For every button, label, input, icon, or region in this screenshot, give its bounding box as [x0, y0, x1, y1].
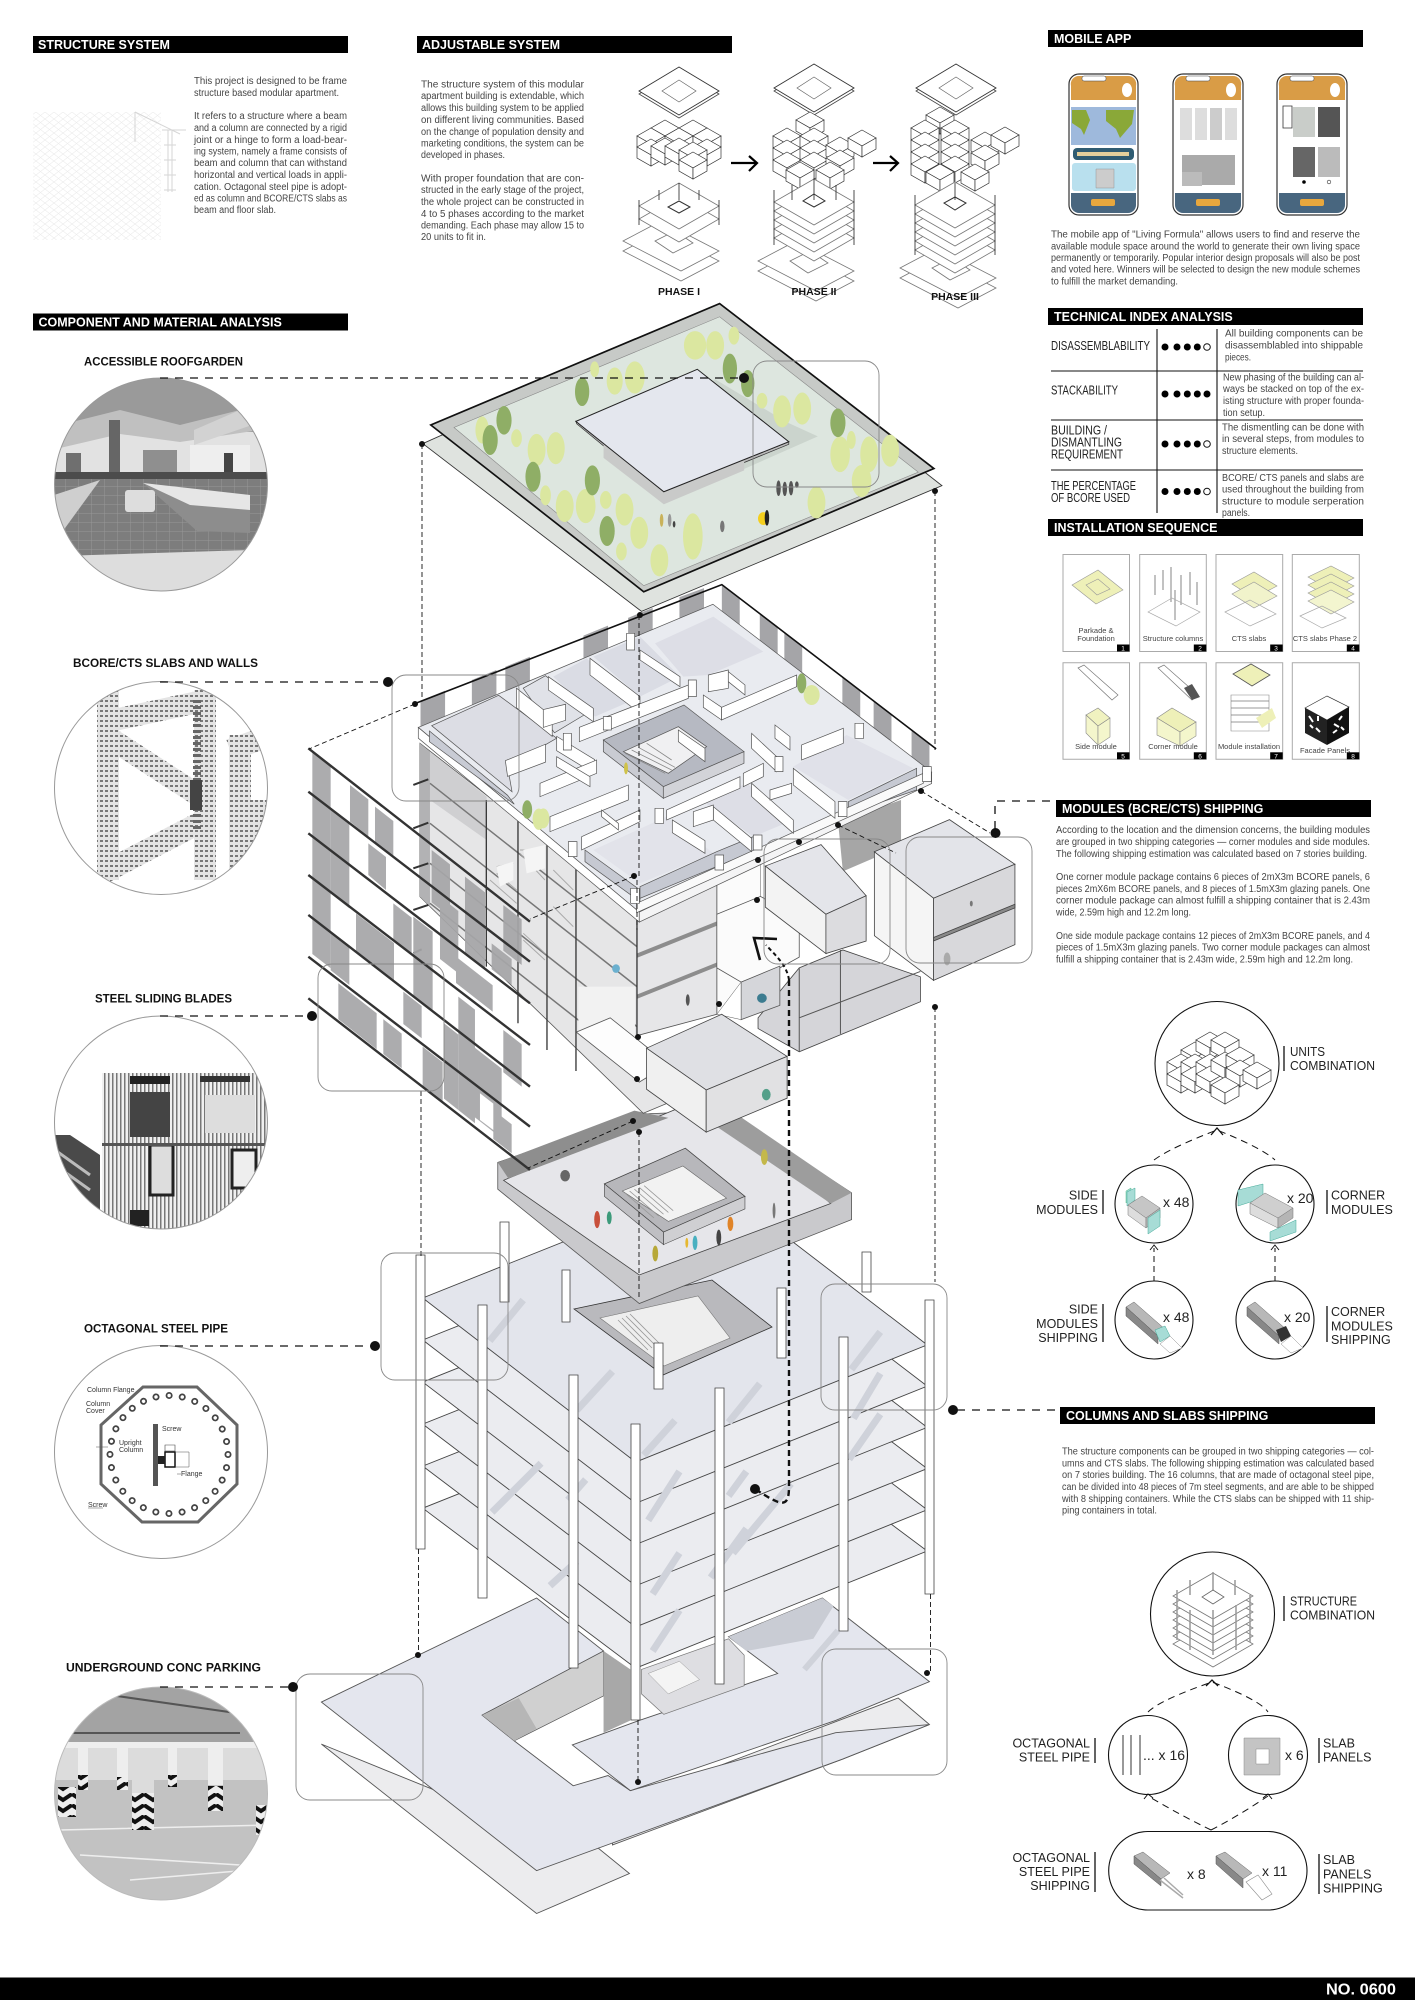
footer bar: NO. 0600 [1326, 1982, 1396, 1998]
row: disassemblability: disassemblabled into shippable [1225, 340, 1363, 352]
adjustable system text: 20 units to fit in. [421, 232, 486, 243]
card 8 [1292, 663, 1359, 760]
diagram: side modules shipping: MODULES [1036, 1317, 1098, 1331]
dashed projection lines [309, 444, 990, 1782]
columns shipping text [1061, 1446, 1374, 1516]
mobile app text: The mobile app of "Living Formula" allows users to find and reserve the [1051, 230, 1360, 240]
diagram: octagonal steel pipe: STEEL PIPE [1019, 1750, 1090, 1764]
structure system text: beam and floor slab. [194, 205, 276, 216]
label: underground conc parking: UNDERGROUND CONC PARKING [66, 1660, 261, 1674]
diagram: slab panels: SLAB [1323, 1736, 1355, 1750]
modules shipping text: corner module package can almost fulfill a shipping container that is 2.43m [1056, 896, 1370, 906]
card 7: Module installation [1218, 742, 1280, 751]
diagram: shipping pill: x 11 [1262, 1863, 1288, 1879]
structure system text: and a column are connected by a rigid [194, 123, 347, 134]
card 4 [1292, 554, 1359, 652]
diagram: units combination: UNITS [1290, 1045, 1325, 1059]
circle photo: roof garden [50, 375, 275, 600]
diagram: corner modules shipping [1236, 1281, 1393, 1359]
circle: octagonal steel pipe section: Flange [181, 1471, 203, 1478]
columns shipping text: can be divided into 48 pieces of 7m steel segments, and are able to be shipped [1062, 1482, 1374, 1493]
phase I diagram [623, 67, 721, 281]
phase II diagram [758, 64, 876, 301]
trees light [475, 327, 899, 576]
heading: modules shipping: MODULES (BCRE/CTS) SHIPPING [1062, 802, 1263, 816]
rear facade blades [421, 585, 929, 772]
heading: mobile app: MOBILE APP [1054, 32, 1131, 46]
phone 3: gallery screen [1277, 74, 1347, 215]
circle photo: steel blades [50, 1015, 275, 1235]
card 6: 6 [1198, 753, 1202, 760]
mobile app text: available module space around the world to generate their own living space [1051, 242, 1360, 252]
mobile app text: to fulfill the market demanding. [1051, 276, 1178, 288]
arrows: to structure combination [1148, 1680, 1268, 1712]
card 6: Corner module [1148, 742, 1198, 751]
diagram: corner modules shipping: x 20 [1284, 1309, 1311, 1325]
diagram: shipping pill: SHIPPING [1323, 1882, 1383, 1896]
row: stackability: tion setup. [1223, 408, 1265, 419]
main exploded axonometric [296, 304, 1032, 1914]
arrows: shipping to structure parts [1144, 1794, 1272, 1830]
room walls [540, 650, 843, 853]
diagram: slab panels [1228, 1716, 1371, 1794]
heading: installation sequence [1048, 519, 1363, 536]
module tower [413, 743, 1015, 1132]
technical index table [1051, 328, 1364, 519]
diagram: shipping pill: PANELS [1323, 1868, 1371, 1882]
label: accessible roofgarden: ACCESSIBLE ROOFGARDEN [84, 354, 243, 368]
phone 1: map screen [1069, 74, 1138, 215]
heading: technical index analysis: TECHNICAL INDEX ANALYSIS [1054, 310, 1233, 324]
row: stackability: isting structure with proper founda- [1223, 396, 1364, 407]
card 2: 2 [1198, 646, 1202, 652]
roof people [660, 480, 799, 532]
leader: columns shipping [948, 1405, 1060, 1415]
diagram: corner modules [1236, 1165, 1393, 1243]
adjustable system text: on different living communities. Based [421, 115, 584, 126]
card 4: 4 [1351, 646, 1355, 652]
card 1: Parkade & [1078, 626, 1114, 635]
structure system text: It refers to a structure where a beam [194, 111, 347, 122]
diagram: side modules shipping: x 48 [1163, 1309, 1190, 1325]
card 3: CTS slabs [1232, 634, 1267, 643]
phase II label: PHASE II [792, 286, 837, 298]
adjustable system text: on the change of population density and [421, 127, 584, 138]
adjustable system text: allows this building system to be applied [421, 103, 584, 114]
card 3 [1216, 554, 1283, 652]
diagram: slab panels: PANELS [1323, 1750, 1371, 1764]
phase III diagram [900, 64, 1019, 308]
adjustable system text: developed in phases. [421, 150, 505, 161]
row: building / dismantling requirement: REQUIREMENT [1051, 448, 1123, 462]
circle: octagonal steel pipe section: Screw [88, 1502, 108, 1509]
installation sequence cards [1063, 554, 1359, 760]
circle: octagonal steel pipe section: Screw [162, 1426, 182, 1433]
card 6 [1140, 663, 1206, 760]
small pillars [563, 633, 931, 903]
heading: adjustable system: ADJUSTABLE SYSTEM [422, 38, 560, 52]
diagram: units combination [1155, 1002, 1375, 1126]
row: percentage of bcore used: THE PERCENTAGE [1051, 479, 1136, 493]
adjustable system text: the whole project can be constructed in [421, 197, 584, 208]
icon: pipe container [1134, 1852, 1183, 1898]
row: building / dismantling requirement: structure elements. [1222, 446, 1298, 457]
heading: technical index analysis [1048, 308, 1363, 325]
icon: slab container [1216, 1852, 1272, 1900]
left rooms [432, 695, 557, 792]
diagram: side modules [1036, 1165, 1193, 1243]
connection dots [412, 441, 938, 1785]
structure system text: joint or a hinge to form a load-bear- [193, 135, 347, 146]
adjustable system text: 4 to 5 phases according to the market [421, 209, 584, 220]
card 7 [1216, 663, 1283, 760]
structure system text: structure based modular apartment. [194, 88, 339, 99]
label: bcore/cts slabs and walls: BCORE/CTS SLABS AND WALLS [73, 656, 258, 670]
modules shipping text: are grouped in two shipping categories — corner modules and side modules. [1056, 837, 1370, 848]
columns shipping text: on 7 stories building. The 16 columns, that are made of octagonal steel pipe, [1062, 1470, 1374, 1481]
card 1: Foundation [1077, 634, 1115, 643]
modules shipping text: One corner module package contains 6 pieces of 2mX3m BCORE panels, 6 [1056, 872, 1370, 883]
planters [797, 673, 806, 693]
circle: octagonal steel pipe section: Column [119, 1447, 143, 1454]
diagram: corner modules: CORNER [1331, 1188, 1385, 1202]
tower left face [413, 743, 668, 1113]
structure system text: ing system, namely a frame consists of [194, 146, 347, 158]
circle: octagonal steel pipe section: Column [86, 1401, 110, 1408]
diagram: shipping pill: SLAB [1323, 1853, 1355, 1867]
row: building / dismantling requirement: DISMANTLING [1051, 436, 1122, 450]
arrow: phase II to III [873, 156, 898, 171]
heading: structure system: STRUCTURE SYSTEM [38, 38, 170, 52]
diagram: octagonal steel pipe: ... x 16 [1143, 1747, 1185, 1763]
structure system text: beam and column that can withstand [194, 158, 347, 169]
circle: octagonal steel pipe section [54, 1346, 268, 1558]
phase III label: PHASE III [931, 291, 979, 303]
card 8: 8 [1351, 753, 1355, 760]
diagram: side modules: SIDE [1069, 1188, 1098, 1202]
card 1 [1063, 554, 1130, 652]
modules shipping text: One side module package contains 12 pieces of 2mX3m BCORE panels, and 4 [1056, 931, 1370, 942]
adjustable system text: The structure system of this modular [421, 80, 585, 90]
row: stackability: New phasing of the building can al- [1223, 372, 1364, 384]
card 7: 7 [1274, 753, 1278, 760]
heading: modules shipping [1056, 800, 1371, 817]
leader: roof garden [160, 373, 749, 383]
module box: upper middle [765, 845, 866, 954]
tower floor slabs [423, 1182, 927, 1668]
central stair core [603, 705, 744, 787]
assembly path arrow [750, 938, 789, 1503]
columns shipping text: with 8 shipping containers. While the CTS slabs can be shipped with 11 ship- [1061, 1494, 1374, 1505]
mobile app text: permanently or temporarily. Popular interior design proposals will also be post [1051, 253, 1360, 264]
module box: far right [874, 820, 1015, 980]
footer bar [0, 1978, 1415, 2000]
trees dark [483, 354, 846, 546]
heading: component and material analysis [33, 314, 348, 330]
heading: installation sequence: INSTALLATION SEQUENCE [1054, 521, 1217, 535]
diagram: corner modules: MODULES [1331, 1203, 1393, 1217]
card 5: Side module [1075, 742, 1117, 751]
heading: columns and slabs shipping [1060, 1407, 1375, 1424]
diagram: side modules shipping: SIDE [1069, 1302, 1098, 1316]
diagram: corner modules shipping: CORNER [1331, 1305, 1385, 1319]
row: stackability: ways be stacked on top of the ex- [1222, 384, 1364, 395]
core recess in slab [574, 1280, 772, 1375]
modules shipping text: pieces 2mX6m BCORE panels, and 8 pieces of 1.5mX3m glazing panels. One [1056, 884, 1370, 895]
modules shipping text: wide, 2.59m high and 12.2m long. [1055, 908, 1191, 918]
roof garden slab [423, 304, 942, 611]
diagram: side modules: MODULES [1036, 1203, 1098, 1217]
row: percentage of bcore used: BCORE/ CTS panels and slabs are [1222, 473, 1364, 484]
diagram: units combination: COMBINATION [1290, 1059, 1375, 1073]
diagram: slab panels: x 6 [1285, 1747, 1304, 1763]
circle: octagonal steel pipe section: Column Flange [87, 1387, 135, 1394]
diagram: side modules shipping: SHIPPING [1038, 1331, 1098, 1345]
leader: bcore slabs [160, 677, 393, 687]
arrow: side shipping to side modules [1150, 1245, 1158, 1282]
diagram: side modules shipping [1036, 1281, 1193, 1359]
phone 2: catalogue screen [1173, 74, 1243, 215]
mobile app text [1051, 230, 1360, 288]
structure system text: horizontal and vertical loads in appli- [194, 170, 347, 181]
modules shipping text: pieces of 1.5mX3m glazing panels. Two corner module packages can almost [1056, 942, 1370, 954]
diagram: corner modules: x 20 [1287, 1190, 1314, 1206]
row: disassemblability: pieces. [1225, 352, 1251, 364]
structure system text [193, 76, 347, 216]
diagram: shipping pill [1012, 1832, 1383, 1910]
mobile app text: and voted here. Winners will be selected to design the new module schemes [1051, 264, 1360, 276]
row: building / dismantling requirement: in several steps, from modules to [1222, 434, 1364, 445]
diagram: shipping pill: STEEL PIPE [1019, 1865, 1090, 1879]
circle photo: underground parking [50, 1685, 275, 1905]
row: stackability: STACKABILITY [1051, 384, 1119, 398]
card 8: Facade Panels [1300, 746, 1350, 755]
heading: mobile app [1048, 30, 1363, 47]
card 2 [1140, 554, 1206, 652]
person on stair [624, 762, 628, 774]
adjustable system text: apartment building is extendable, which [421, 91, 584, 102]
top floor rooms [415, 585, 936, 922]
structure system text: ed as column and BCORE/CTS slabs as [194, 194, 347, 204]
card 3: 3 [1274, 646, 1278, 652]
card 2: Structure columns [1143, 634, 1203, 643]
people [560, 1149, 775, 1261]
row: building / dismantling requirement [1051, 422, 1364, 462]
module box: front [647, 1014, 787, 1132]
modules shipping text: According to the location and the dimension concerns, the building modules [1056, 825, 1370, 836]
row: building / dismantling requirement: BUILDING / [1051, 424, 1107, 438]
row: disassemblability: DISASSEMBLABILITY [1051, 339, 1151, 353]
circle: octagonal steel pipe section: Cover [86, 1408, 105, 1415]
leader: steel blades [160, 1011, 317, 1021]
card 1: 1 [1121, 646, 1125, 652]
row: percentage of bcore used: OF BCORE USED [1051, 491, 1130, 505]
diagram: shipping pill: x 8 [1187, 1866, 1206, 1882]
columns shipping text: The structure components can be grouped in two shipping categories — col- [1062, 1446, 1374, 1458]
row: stackability [1051, 372, 1364, 419]
leader: modules shipping [990, 801, 1058, 838]
card 5 [1063, 663, 1130, 760]
diagram: shipping pill: SHIPPING [1030, 1879, 1090, 1893]
heading: columns and slabs shipping: COLUMNS AND SLABS SHIPPING [1066, 1409, 1268, 1423]
diagram: corner modules shipping: MODULES [1331, 1320, 1393, 1334]
row: percentage of bcore used: used throughout the building from [1222, 484, 1364, 496]
row: percentage of bcore used: structure to module serperation [1222, 496, 1364, 508]
heading: adjustable system [417, 36, 732, 53]
leader: parking [160, 1682, 298, 1692]
modules shipping text [1055, 825, 1370, 966]
leader: octagonal pipe [160, 1341, 380, 1351]
adjustable system text [421, 80, 585, 243]
module box right small [717, 896, 799, 982]
diagram: octagonal steel pipe [1012, 1716, 1188, 1794]
row: building / dismantling requirement: The dismentling can be done with [1222, 422, 1364, 434]
row: percentage of bcore used [1051, 473, 1364, 519]
adjustable system text: With proper foundation that are con- [421, 174, 584, 184]
columns shipping text: umns and CTS slabs. The following shipping estimation was calculated based [1062, 1458, 1374, 1470]
diagram: side modules: x 48 [1163, 1194, 1190, 1210]
heading: structure system [33, 36, 348, 53]
structure system text: This project is designed to be frame [194, 76, 347, 87]
card 4: CTS slabs Phase 2 [1293, 634, 1357, 643]
adjustable system text: demanding. Each phase may allow 15 to [421, 220, 584, 232]
circle: bcore panel detail [54, 680, 272, 900]
diagram: octagonal steel pipe: OCTAGONAL [1012, 1736, 1090, 1750]
callout frames [296, 361, 1032, 1800]
row: disassemblability: All building components can be [1225, 328, 1363, 340]
modules shipping text: fulfill a shipping container that is 2.43m wide, 2.59m high and 12.2m long. [1056, 954, 1353, 966]
heading: component and material analysis: COMPONENT AND MATERIAL ANALYSIS [38, 316, 282, 330]
adjustable system text: marketing conditions, the system can be [421, 138, 584, 150]
columns shipping text: ping containers in total. [1062, 1506, 1157, 1516]
arrow: corner shipping to corner modules [1271, 1245, 1279, 1282]
arrow: modules to units [1154, 1128, 1275, 1160]
structure system text: cation. Octagonal steel pipe is adopt- [194, 182, 347, 193]
label: steel sliding blades: STEEL SLIDING BLADES [95, 992, 232, 1006]
phase I label: PHASE I [658, 286, 700, 298]
diagram: structure combination: COMBINATION [1290, 1608, 1375, 1622]
structural columns [416, 1222, 934, 1720]
row: percentage of bcore used: panels. [1222, 508, 1250, 519]
modules shipping text: The following shipping estimation was calculated based on 7 stories building. [1056, 849, 1367, 860]
sliding blade facade [308, 748, 530, 1170]
room floors [655, 617, 763, 677]
diagram: corner modules shipping: SHIPPING [1331, 1333, 1391, 1347]
arrow: phase I to II [731, 156, 757, 171]
adjustable system text: structed in the early stage of the project, [421, 185, 584, 196]
diagram: shipping pill: OCTAGONAL [1012, 1851, 1090, 1865]
diagram: structure combination [1150, 1552, 1375, 1676]
circle: octagonal steel pipe section: Upright [119, 1440, 142, 1447]
diagram: structure combination: STRUCTURE [1290, 1594, 1357, 1608]
row: disassemblability [1051, 328, 1363, 364]
ground floor lobby slab [498, 1096, 852, 1304]
label: octagonal steel pipe: OCTAGONAL STEEL PIPE [84, 1322, 228, 1336]
structure system faint drawing [33, 112, 186, 240]
card 5: 5 [1121, 753, 1125, 760]
parking slabs [321, 1598, 929, 1914]
